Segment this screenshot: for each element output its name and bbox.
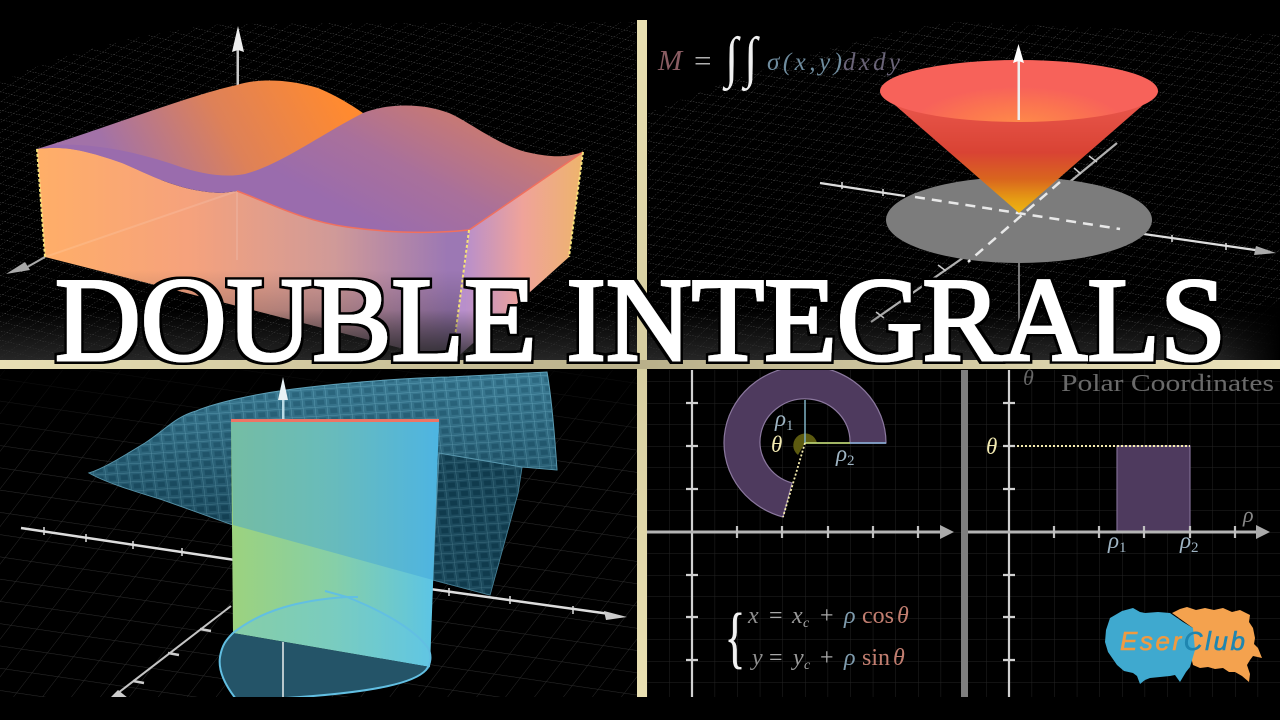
- horizontal divider: cream: [0, 360, 1280, 369]
- top surface with second hump: [37, 105, 583, 232]
- floor grid: [0, 370, 637, 697]
- region segment below chord: [220, 633, 430, 699]
- panel: polar region in cartesian plane: [647, 366, 962, 697]
- dashed axes across the disk: [915, 182, 1120, 262]
- faint floor diagonal: [45, 191, 237, 260]
- equation y: =: [769, 645, 783, 671]
- panel: mass integral over a cone: [648, 22, 1280, 360]
- panel: surface and curtain over region: [0, 370, 637, 700]
- formula: mass: [657, 27, 901, 91]
- formula: mass: M: [657, 45, 684, 77]
- y axis: [108, 606, 231, 700]
- theta axis with ticks: [1003, 370, 1015, 697]
- plane grid: [968, 370, 1280, 697]
- vertical divider: grey: [961, 370, 968, 697]
- cone opening: [880, 60, 1158, 122]
- shading of front face: [45, 191, 469, 362]
- haze behind title: [0, 310, 1280, 360]
- label: rho 1: ρ: [775, 406, 786, 431]
- cone outer surface: [880, 92, 1158, 213]
- panel: polar rectangle: [968, 365, 1280, 697]
- equation x: +: [820, 603, 834, 629]
- equation x: θ: [897, 603, 909, 629]
- haze fade at right: [1215, 305, 1280, 360]
- logo blue splash: [1105, 608, 1195, 684]
- z axis arrow: [1013, 44, 1024, 120]
- radius lines: [805, 400, 886, 443]
- dashed vertical edges: [37, 149, 583, 360]
- y axis: [871, 143, 1117, 322]
- equation x: =: [769, 603, 783, 629]
- equation y: sin: [862, 645, 890, 671]
- equation x: x: [791, 603, 803, 629]
- label: rho 1: 1: [786, 418, 794, 434]
- dotted radius: [783, 443, 805, 517]
- x axis: [820, 182, 1276, 255]
- lower z axis: [1018, 263, 1020, 343]
- label: rho 2: 2: [847, 453, 855, 469]
- annular sector: [724, 366, 886, 517]
- formula: mass: dxdy: [843, 49, 901, 76]
- title: DOUBLE INTEGRALS: [55, 253, 1226, 386]
- curtain: [231, 421, 439, 667]
- red surface edge: [237, 152, 583, 232]
- formula: mass: =: [694, 43, 711, 78]
- formula: mass: σ(x,y): [767, 49, 842, 76]
- vertical axis arrow: [232, 26, 244, 90]
- equation y: θ: [893, 645, 905, 671]
- mesh seen through curtain: [231, 421, 439, 580]
- equation x: c: [803, 616, 810, 631]
- equation x: ρ: [843, 603, 856, 629]
- tick label theta: θ: [986, 434, 997, 459]
- formula: mass: ∫∫: [722, 27, 763, 91]
- axis label theta: θ: [1023, 365, 1034, 390]
- grey disk: [886, 177, 1152, 263]
- logo: [1105, 607, 1262, 684]
- panel: volume under a surface: [0, 22, 636, 362]
- brace: {: [725, 599, 745, 675]
- logo orange splash: [1172, 607, 1262, 682]
- equation y: y: [750, 645, 763, 671]
- label: rho 2: ρ: [836, 441, 847, 466]
- vertical divider: cream: [637, 20, 647, 697]
- dotted theta line: [1009, 445, 1190, 447]
- z axis arrow: [278, 377, 288, 421]
- tick label rho 1: ρ: [1108, 528, 1119, 553]
- red top edge: [231, 419, 439, 422]
- tick label rho 1: 1: [1119, 540, 1127, 556]
- floor grid: [648, 22, 1280, 360]
- equation y: +: [820, 645, 834, 671]
- panel caption: Polar Coordinates: [1061, 371, 1274, 397]
- front face of the solid: [37, 148, 469, 362]
- mesh surface: upper sheet: [88, 372, 558, 536]
- label: theta: θ: [771, 432, 782, 457]
- lower z axis: [282, 642, 284, 697]
- right face of the solid: [452, 152, 583, 362]
- angle marker: [793, 433, 817, 455]
- mesh surface: lower fold: [433, 453, 522, 595]
- horizontal axis arrow: [647, 525, 954, 539]
- equation y: c: [804, 658, 811, 673]
- logo wordmark: EserClub: [1120, 626, 1245, 656]
- grid fade: [0, 370, 637, 438]
- equation x: x: [747, 603, 759, 629]
- region cap above chord: [233, 597, 430, 667]
- tick label rho 2: ρ: [1180, 528, 1191, 553]
- axis label rho: ρ: [1242, 502, 1254, 527]
- equation x: cos: [862, 603, 894, 629]
- region outline: [220, 591, 430, 699]
- plane grid: [647, 370, 962, 697]
- left axis arrow: [6, 257, 45, 274]
- equation y: y: [791, 645, 804, 671]
- equation y: ρ: [843, 645, 856, 671]
- rectangle region: [1117, 446, 1190, 532]
- vertical axis with ticks: [686, 370, 698, 697]
- back surface: [37, 80, 363, 180]
- rho axis arrow: [968, 525, 1270, 539]
- x axis: [21, 527, 627, 620]
- tick label rho 2: 2: [1191, 540, 1199, 556]
- floor grid: [0, 22, 636, 360]
